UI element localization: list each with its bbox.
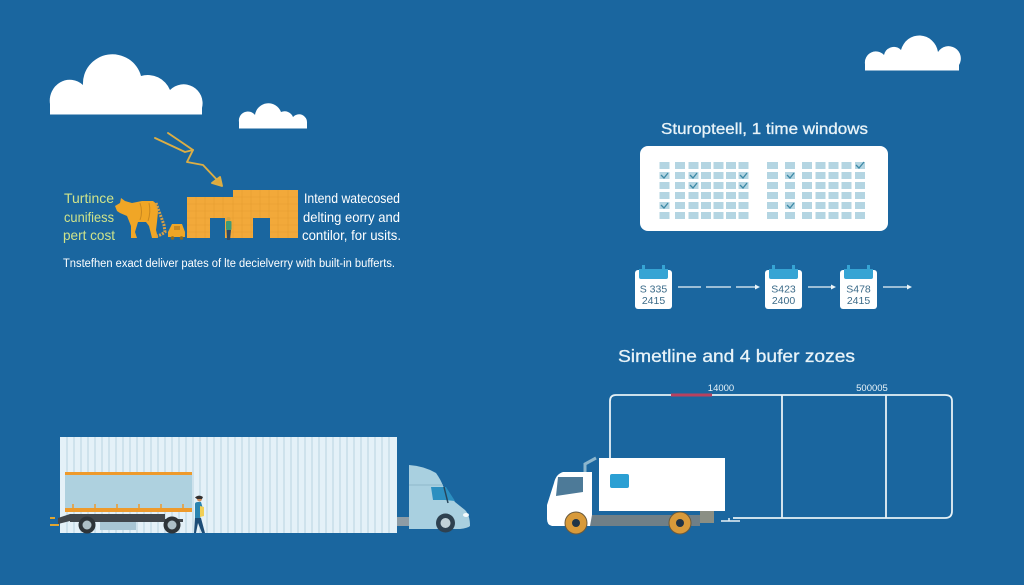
arrows between calendars	[678, 284, 912, 290]
worker	[194, 496, 205, 533]
icon: small cart	[168, 224, 185, 240]
left text: cost: Turtince	[64, 190, 114, 206]
timeline bracket	[610, 395, 952, 521]
timeline labels: 14000	[708, 383, 734, 394]
right text: intend: contilor, for usits.	[302, 227, 401, 243]
calendar icon 2: 2400	[772, 295, 795, 307]
calendar icon 3: 2415	[847, 295, 870, 307]
semi tractor cab	[397, 465, 470, 532]
icon: animal silhouette	[115, 198, 165, 238]
left text: cost: pert cost	[63, 227, 115, 243]
red segment	[671, 394, 712, 396]
calendar icon 3	[840, 265, 877, 309]
icon: worker at wall	[226, 217, 232, 240]
calendar cells	[660, 162, 865, 219]
cab	[547, 472, 592, 526]
left text: cost: cunifiess	[64, 209, 114, 225]
calendar icon 1: 2415	[642, 295, 665, 307]
check marks	[661, 162, 864, 208]
calendar icon 2	[765, 265, 802, 309]
cargo box	[599, 458, 725, 511]
calendar icon 2: S423	[771, 284, 796, 296]
left text: cost	[63, 190, 115, 243]
cloud: top right	[865, 35, 961, 70]
timeline labels	[708, 383, 888, 394]
timeline labels: 500005	[856, 383, 888, 394]
lightning arrow	[155, 133, 222, 186]
calendar icon 3: S478	[846, 284, 871, 296]
wheels	[565, 512, 587, 534]
right text: intend	[302, 190, 401, 243]
right text: intend: Intend watecosed	[304, 190, 400, 206]
calendar icon 1	[635, 265, 672, 309]
cloud: large left	[50, 54, 203, 114]
panel: calendar grid	[640, 146, 888, 231]
heading: timeline: Simetline and 4 bufer zozes	[618, 346, 855, 366]
right text: intend: delting eorry and	[303, 209, 400, 225]
left caption: Tnstefhen exact deliver pates of lte decielverry with built-in bufferts.	[63, 258, 395, 270]
icon: orange block wall	[187, 190, 298, 238]
cloud: small left	[239, 103, 307, 128]
exhaust	[585, 458, 596, 472]
heading: time windows: Sturopteell, 1 time windows	[661, 121, 868, 138]
chassis	[590, 515, 700, 526]
calendar icon 1: S 335	[640, 284, 667, 296]
large trailer	[60, 437, 397, 533]
white delivery truck	[547, 458, 725, 534]
flatbed truck	[50, 472, 192, 534]
